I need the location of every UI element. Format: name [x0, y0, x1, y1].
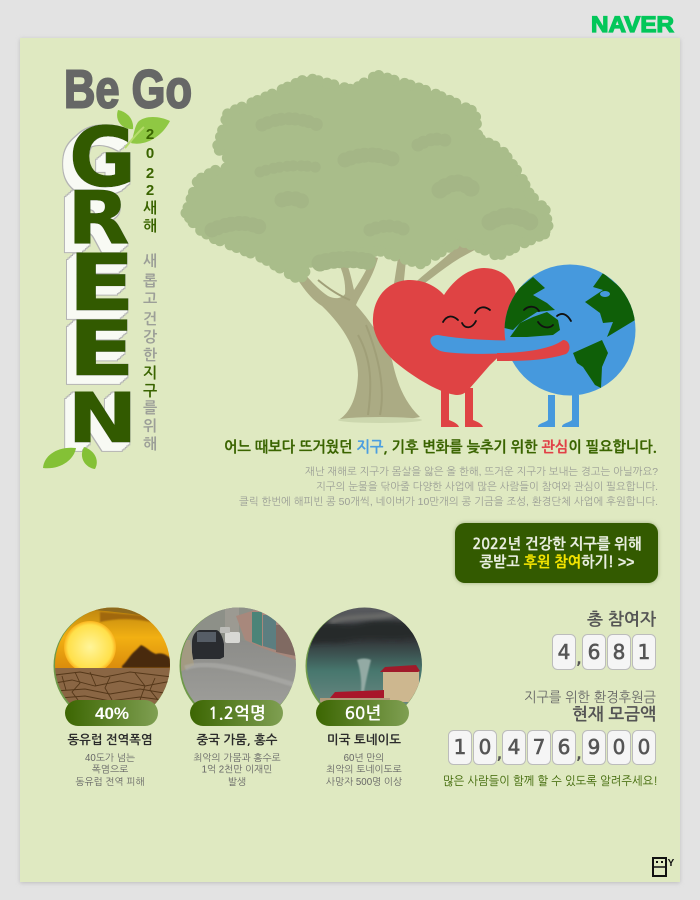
tree trunk and branches	[280, 240, 480, 421]
vertical text: 2022 new year: 해	[143, 218, 157, 235]
counter: participants: 8	[613, 640, 625, 664]
stat pill: 1.2: 1.2억명	[208, 704, 266, 722]
vertical text: 2022 new year: 2	[146, 126, 154, 143]
photo: tornado	[306, 608, 422, 705]
photo: drought sun	[54, 608, 170, 704]
vertical text: for a healthy new earth: 강	[143, 329, 158, 346]
photo: flooded street	[180, 608, 296, 705]
body text: 클릭 한번에 해피빈 콩 50개씩, 네이버가 10만개의 콩 기금을 조성, 환경단체 사업에 후원합니다.	[239, 496, 658, 508]
stat pill: 60 years	[316, 700, 409, 726]
title: GREEN 3D letters: R	[68, 176, 130, 261]
stat pill: 60 years: 60년	[345, 704, 381, 722]
canopy foliage edge	[186, 75, 549, 280]
icon: top leaves	[117, 110, 170, 148]
body text	[239, 466, 658, 508]
vertical text: 2022 new year: 0	[146, 145, 154, 162]
faces	[443, 307, 571, 327]
counter: participants: 1	[638, 640, 650, 664]
card text	[326, 753, 403, 788]
heart legs	[441, 388, 483, 427]
counter: amount: ,	[497, 747, 502, 763]
card: europe heatwave	[50, 605, 175, 788]
stat pill: 40%: 40%	[95, 704, 129, 723]
title: GREEN 3D letters	[68, 111, 138, 459]
card text: 1억 2천만 이재민	[202, 764, 272, 776]
naver logo: NAVER	[591, 12, 674, 37]
counter: amount: 9	[588, 735, 600, 759]
title: GREEN 3D letters: E	[68, 304, 135, 393]
card: china drought and flood	[175, 605, 300, 788]
card title: 중국 가뭄, 홍수	[196, 733, 278, 746]
counter: amount: 6	[558, 735, 570, 759]
heart body	[373, 268, 516, 395]
body text: 지구의 눈물을 닦아줄 다양한 사업에 많은 사람들이 참여와 관심이 필요합니다.	[316, 481, 658, 493]
stat pill: 40%	[65, 700, 158, 726]
card: us tornado	[306, 608, 422, 786]
title: Be Go: Be Go	[64, 60, 192, 120]
vertical text: for a healthy new earth: 해	[143, 436, 157, 453]
counter: amount	[448, 730, 656, 764]
headline: 어느 때보다 뜨거웠던 지구, 기후 변화를 늦추기 위한 관심이 필요합니다.	[224, 439, 657, 455]
illustration: tree	[186, 75, 549, 423]
earth legs	[538, 395, 579, 427]
illustration: earth character	[373, 264, 640, 427]
title: GREEN 3D letters: G	[69, 111, 136, 206]
button: donate	[455, 523, 658, 583]
stat pill: 1.2	[190, 700, 283, 726]
body text: 재난 재해로 지구가 몸살을 앓은 올 한해, 뜨거운 지구가 보내는 경고는 아닐까요?	[305, 466, 658, 478]
vertical text: 2022 new year: 새	[143, 200, 157, 217]
card title: 미국 토네이도	[327, 733, 401, 746]
vertical text: for a healthy new earth: 위	[143, 418, 157, 435]
vertical text: for a healthy new earth: 를	[143, 400, 157, 417]
card text: 발생	[228, 776, 246, 788]
counter: amount: ,	[576, 747, 582, 763]
card title: 동유럽 전역폭염	[68, 733, 152, 746]
vertical text: for a healthy new earth: 건	[143, 311, 157, 328]
canopy shading	[212, 119, 530, 263]
trunk streaks	[318, 280, 382, 415]
counter: amount: 0	[479, 735, 491, 759]
vertical text: 2022 new year: 2	[146, 182, 154, 199]
earth continents	[500, 273, 640, 388]
vertical text: for a healthy new earth: 한	[143, 347, 157, 364]
counter: participants: 6	[588, 640, 600, 664]
hug arm: blue	[430, 335, 567, 354]
counter: amount: 0	[613, 735, 625, 759]
icon: bottom leaves	[43, 447, 97, 469]
counter: amount: 0	[638, 735, 650, 759]
icon: fridge logo: Y	[668, 858, 675, 869]
earth bay	[600, 291, 610, 297]
vertical text: for a healthy new earth: 지	[143, 365, 157, 382]
share message: 많은 사람들이 함께 할 수 있도록 알려주세요!	[443, 774, 658, 787]
vertical text: 2022 new year: 2	[146, 165, 154, 182]
title: GREEN 3D letters: N	[68, 379, 138, 459]
vertical text: for a healthy new earth	[143, 253, 158, 453]
counter: amount: 1	[454, 735, 466, 759]
card text	[75, 753, 145, 788]
card text: 40도가 넘는	[85, 753, 135, 764]
card text: 폭염으로	[92, 764, 128, 776]
vertical text: for a healthy new earth: 롭	[143, 273, 157, 290]
vertical text: 2022 new year	[143, 126, 157, 235]
tree shadow	[338, 417, 422, 423]
card text	[193, 753, 281, 788]
counter: participants: 4	[558, 640, 570, 664]
card text: 최악의 가뭄과 홍수로	[193, 753, 281, 764]
vertical text: for a healthy new earth: 구	[143, 383, 157, 400]
title: GREEN 3D letters: E	[68, 239, 135, 329]
card text: 사망자 500명 이상	[326, 776, 403, 788]
earth globe	[504, 264, 636, 396]
counter: participants: ,	[576, 652, 582, 668]
button: donate: 2022년 건강한 지구를 위해	[472, 536, 642, 552]
card text: 동유럽 전역 피해	[75, 777, 145, 788]
hug arm: red	[497, 340, 570, 361]
icon: fridge logo	[653, 858, 675, 876]
vertical text: for a healthy new earth: 고	[143, 291, 157, 308]
vertical text: for a healthy new earth: 새	[143, 253, 157, 270]
counter: amount: 7	[533, 735, 545, 759]
counter: amount: 4	[508, 735, 520, 759]
heading: total participants: 총 참여자	[587, 610, 656, 628]
card text: 60년 만의	[344, 753, 384, 764]
heading: current amount: 현재 모금액	[572, 705, 656, 723]
card text: 최악의 토네이도로	[326, 764, 402, 776]
label: environmental donation: 지구를 위한 환경후원금	[524, 690, 656, 705]
tree canopy	[186, 75, 549, 280]
button: donate: 콩받고 후원 참여하기! >>	[480, 554, 635, 571]
counter: participants	[552, 634, 656, 670]
